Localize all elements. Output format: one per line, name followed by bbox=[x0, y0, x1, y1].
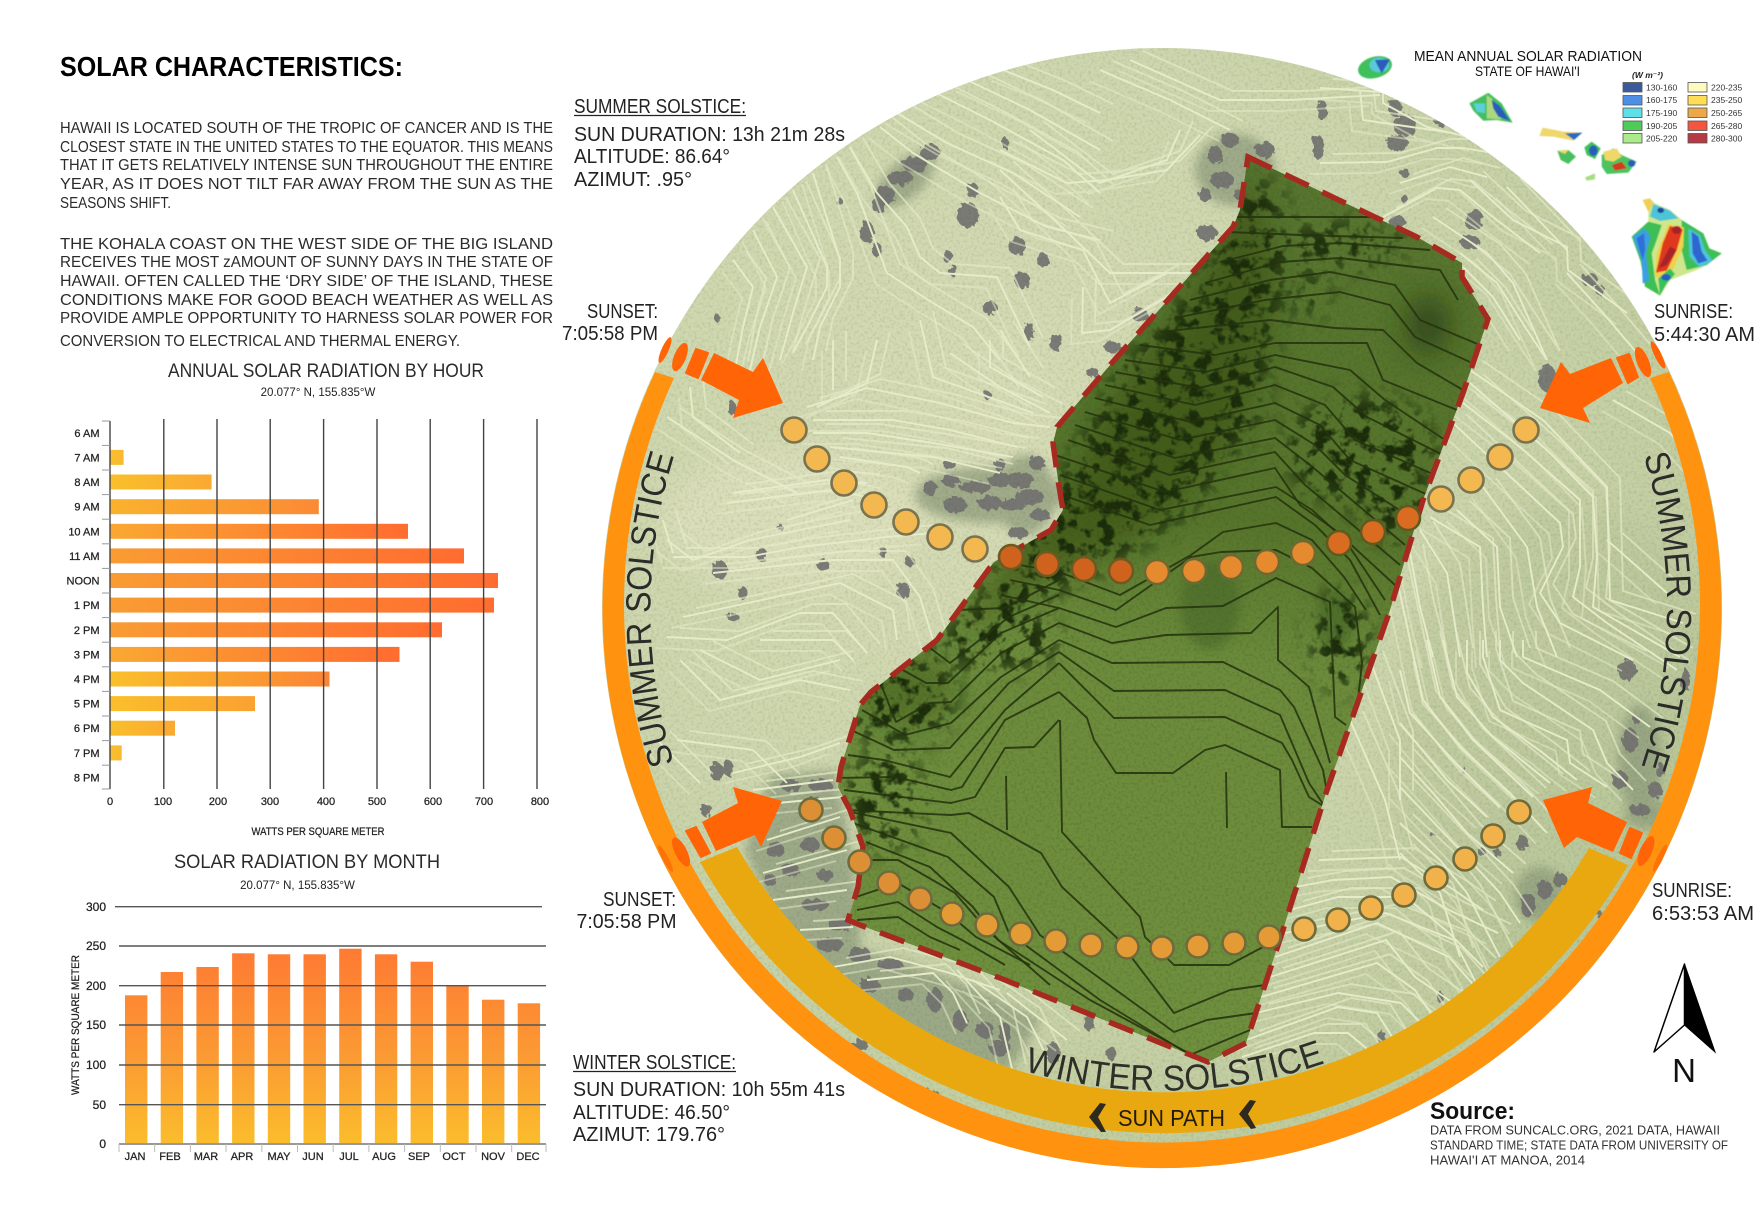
vertical bars bbox=[125, 949, 540, 1144]
paragraph one: HAWAII IS LOCATED SOUTH OF THE TROPIC OF CANCER AND IS THE bbox=[60, 120, 553, 137]
title: SOLAR CHARACTERISTICS: bbox=[60, 51, 403, 82]
sun path label: SUN PATH bbox=[1118, 1105, 1225, 1131]
chart title: SOLAR RADIATION BY MONTH bbox=[174, 852, 440, 873]
horizontal bars bbox=[110, 450, 498, 760]
month labels: JUL bbox=[339, 1151, 359, 1163]
value axis labels: 100 bbox=[154, 796, 172, 808]
value axis labels: 0 bbox=[107, 796, 113, 808]
legend bbox=[1623, 70, 1742, 144]
value labels: 250 bbox=[86, 939, 106, 953]
callout: summer solstice data bbox=[574, 96, 845, 191]
white contour lines bbox=[657, 60, 1700, 1073]
axis title: WATTS PER SQUARE METER bbox=[252, 826, 385, 838]
north arrow bbox=[1654, 964, 1715, 1089]
hour labels: 6 AM bbox=[74, 428, 100, 440]
callout: winter solstice data bbox=[573, 1052, 845, 1146]
month labels: AUG bbox=[372, 1151, 396, 1163]
label: summer sunset time: 7:05:58 PM bbox=[562, 323, 658, 345]
value axis labels: 600 bbox=[424, 796, 442, 808]
hour labels: 9 AM bbox=[74, 502, 100, 514]
month labels: OCT bbox=[442, 1151, 466, 1163]
paragraph one bbox=[60, 120, 553, 212]
summer solstice orange ring bbox=[602, 372, 1721, 1168]
site contour lines bbox=[837, 217, 1480, 1062]
chart title: ANNUAL SOLAR RADIATION BY HOUR bbox=[168, 361, 484, 382]
paragraph one: CLOSEST STATE IN THE UNITED STATES TO THE EQUATOR. THIS MEANS bbox=[60, 139, 553, 156]
site parcel bbox=[830, 150, 1500, 1070]
legend: 280-300 bbox=[1711, 134, 1742, 144]
legend: 220-235 bbox=[1711, 82, 1742, 92]
text block: intro paragraphs bbox=[60, 120, 553, 350]
hour labels bbox=[66, 428, 100, 784]
panel: aerial site map bbox=[600, 40, 1730, 1180]
month labels: JUN bbox=[302, 1151, 324, 1163]
island: Oahu bbox=[1469, 93, 1513, 123]
source note: Source: bbox=[1430, 1098, 1515, 1125]
legend: 160-175 bbox=[1646, 95, 1677, 105]
hour labels: 2 PM bbox=[74, 625, 100, 637]
legend: 265-280 bbox=[1711, 121, 1742, 131]
source note: HAWAI'I AT MANOA, 2014 bbox=[1430, 1154, 1585, 1168]
arrow: summer sunrise bbox=[1540, 340, 1668, 423]
paragraph two bbox=[60, 236, 553, 350]
winter sun path band bbox=[700, 847, 1628, 1133]
value labels: 300 bbox=[86, 900, 106, 914]
label: winter sunset time bbox=[576, 889, 676, 933]
value labels: 50 bbox=[93, 1098, 106, 1112]
label: summer sunrise time bbox=[1654, 301, 1755, 346]
month labels: NOV bbox=[481, 1151, 506, 1163]
callout: summer solstice data: SUN DURATION: 13h 21m 28s bbox=[574, 124, 845, 146]
island: Molokai bbox=[1539, 128, 1582, 141]
label: summer sunset time bbox=[562, 301, 658, 345]
ring label: summer solstice left: SUMMER SOLSTICE bbox=[626, 450, 674, 766]
ring label: winter solstice: WINTER SOLSTICE bbox=[1030, 1040, 1324, 1091]
value labels: 200 bbox=[86, 979, 106, 993]
island: Maui bbox=[1584, 142, 1637, 174]
callout: winter solstice data: WINTER SOLSTICE: bbox=[573, 1052, 736, 1074]
value labels: 150 bbox=[86, 1018, 106, 1032]
paragraph two: HAWAII. OFTEN CALLED THE ‘DRY SIDE’ OF THE ISLAND, THESE bbox=[60, 273, 553, 290]
source note: DATA FROM SUNCALC.ORG, 2021 DATA, HAWAII bbox=[1430, 1124, 1720, 1138]
hour labels: 8 PM bbox=[74, 772, 100, 784]
label: summer sunset time: SUNSET: bbox=[587, 301, 658, 323]
source note bbox=[1430, 1098, 1728, 1168]
month labels: JAN bbox=[125, 1151, 145, 1163]
callout: summer solstice data: SUMMER SOLSTICE: bbox=[574, 96, 746, 118]
mottled tree cover bbox=[845, 170, 1435, 850]
map title: STATE OF HAWAI'I bbox=[1475, 63, 1580, 79]
legend: 130-160 bbox=[1646, 82, 1677, 92]
paragraph one: SEASONS SHIFT. bbox=[60, 195, 171, 212]
paragraph two: RECEIVES THE MOST zAMOUNT OF SUNNY DAYS IN THE STATE OF bbox=[60, 254, 553, 271]
value axis labels: 300 bbox=[261, 796, 279, 808]
arrow: winter sunset bbox=[656, 787, 782, 873]
map title: MEAN ANNUAL SOLAR RADIATION bbox=[1414, 49, 1642, 65]
tree canopy bbox=[700, 100, 1690, 1145]
island: Big Island bbox=[1632, 198, 1722, 296]
panel: mean annual solar radiation map bbox=[1355, 49, 1742, 296]
legend: (W m⁻²) bbox=[1632, 70, 1663, 80]
label: winter sunrise time bbox=[1652, 880, 1754, 925]
legend: 175-190 bbox=[1646, 108, 1677, 118]
hour labels: 10 AM bbox=[68, 526, 100, 538]
hour labels: 7 PM bbox=[74, 748, 100, 760]
paragraph one: YEAR, AS IT DOES NOT TILT FAR AWAY FROM THE SUN AS THE bbox=[60, 176, 553, 193]
month labels: MAR bbox=[194, 1151, 218, 1163]
callout: winter solstice data: SUN DURATION: 10h 55m 41s bbox=[573, 1079, 845, 1101]
soft shading on site bbox=[855, 170, 1450, 730]
chart: solar radiation by month bbox=[70, 852, 546, 1163]
hour labels: 4 PM bbox=[74, 674, 100, 686]
value axis labels: 400 bbox=[317, 796, 335, 808]
hour labels: 1 PM bbox=[74, 600, 100, 612]
arrow: winter sunrise bbox=[1543, 787, 1669, 873]
sun path label bbox=[1089, 1100, 1256, 1132]
month labels: FEB bbox=[159, 1151, 181, 1163]
month labels: SEP bbox=[408, 1151, 430, 1163]
winter sun path dots bbox=[800, 798, 1530, 960]
legend: 190-205 bbox=[1646, 121, 1677, 131]
month labels bbox=[125, 1151, 540, 1163]
label: summer sunrise time: SUNRISE: bbox=[1654, 301, 1733, 323]
callout: summer solstice data: ALTITUDE: 86.64° bbox=[574, 146, 730, 168]
aerial photo background bbox=[600, 40, 1730, 1180]
paragraph two: PROVIDE AMPLE OPPORTUNITY TO HARNESS SOLAR POWER FOR bbox=[60, 310, 553, 327]
value axis labels: 800 bbox=[531, 796, 549, 808]
chevron left bbox=[1089, 1103, 1106, 1132]
legend: 250-265 bbox=[1711, 108, 1742, 118]
callout: winter solstice data: AZIMUT: 179.76° bbox=[573, 1124, 725, 1146]
paragraph two: CONVERSION TO ELECTRICAL AND THERMAL ENERGY. bbox=[60, 333, 460, 350]
paragraph one: THAT IT GETS RELATIVELY INTENSE SUN THROUGHOUT THE ENTIRE bbox=[60, 157, 553, 174]
hour labels: NOON bbox=[66, 576, 100, 588]
value labels: 100 bbox=[86, 1058, 106, 1072]
chart: annual solar radiation by hour bbox=[66, 361, 549, 838]
month labels: DEC bbox=[516, 1151, 540, 1163]
source note: STANDARD TIME; STATE DATA FROM UNIVERSITY OF bbox=[1430, 1138, 1728, 1152]
chart coordinates: 20.077° N, 155.835°W bbox=[240, 880, 355, 892]
value axis labels: 200 bbox=[209, 796, 227, 808]
paragraph two: CONDITIONS MAKE FOR GOOD BEACH WEATHER AS WELL AS bbox=[60, 292, 553, 309]
site boundary dashed bbox=[838, 157, 1488, 1062]
legend: 235-250 bbox=[1711, 95, 1742, 105]
label: winter sunrise time: 6:53:53 AM bbox=[1652, 903, 1754, 925]
legend: 205-220 bbox=[1646, 134, 1677, 144]
summer sun path dots bbox=[782, 418, 1538, 584]
month labels: MAY bbox=[267, 1151, 291, 1163]
hour labels: 11 AM bbox=[69, 551, 100, 563]
chevron right bbox=[1239, 1100, 1256, 1129]
value axis labels bbox=[107, 796, 549, 808]
hour labels: 5 PM bbox=[74, 699, 100, 711]
hour labels: 6 PM bbox=[74, 723, 100, 735]
callout: winter solstice data: ALTITUDE: 46.50° bbox=[573, 1102, 730, 1124]
understory around tree clusters bbox=[745, 134, 1676, 1070]
paragraph two: THE KOHALA COAST ON THE WEST SIDE OF THE BIG ISLAND bbox=[60, 236, 553, 253]
callout: summer solstice data: AZIMUT: .95° bbox=[574, 169, 692, 191]
arrow: summer sunset bbox=[656, 336, 783, 418]
map title bbox=[1414, 49, 1642, 79]
month labels: APR bbox=[231, 1151, 253, 1163]
label: winter sunset time: SUNSET: bbox=[603, 889, 676, 911]
label: winter sunset time: 7:05:58 PM bbox=[576, 911, 676, 933]
label: winter sunrise time: SUNRISE: bbox=[1652, 880, 1732, 902]
island: Lanai bbox=[1557, 150, 1576, 164]
chart coordinates: 20.077° N, 155.835°W bbox=[261, 387, 375, 399]
value axis labels: 700 bbox=[475, 796, 493, 808]
ring label: summer solstice right: SUMMER SOLSTICE bbox=[1642, 452, 1692, 772]
island: Kahoolawe bbox=[1585, 173, 1595, 181]
north arrow: N bbox=[1672, 1052, 1696, 1089]
hour labels: 3 PM bbox=[74, 649, 100, 661]
value axis labels: 500 bbox=[368, 796, 386, 808]
value labels: 0 bbox=[99, 1137, 106, 1151]
value labels bbox=[86, 900, 106, 1151]
hour labels: 7 AM bbox=[74, 452, 100, 464]
label: summer sunrise time: 5:44:30 AM bbox=[1654, 324, 1755, 346]
hour labels: 8 AM bbox=[74, 477, 100, 489]
axis title: WATTS PER SQUARE METER bbox=[70, 955, 82, 1095]
island: Kauai bbox=[1355, 53, 1395, 82]
island maps bbox=[1355, 53, 1722, 296]
